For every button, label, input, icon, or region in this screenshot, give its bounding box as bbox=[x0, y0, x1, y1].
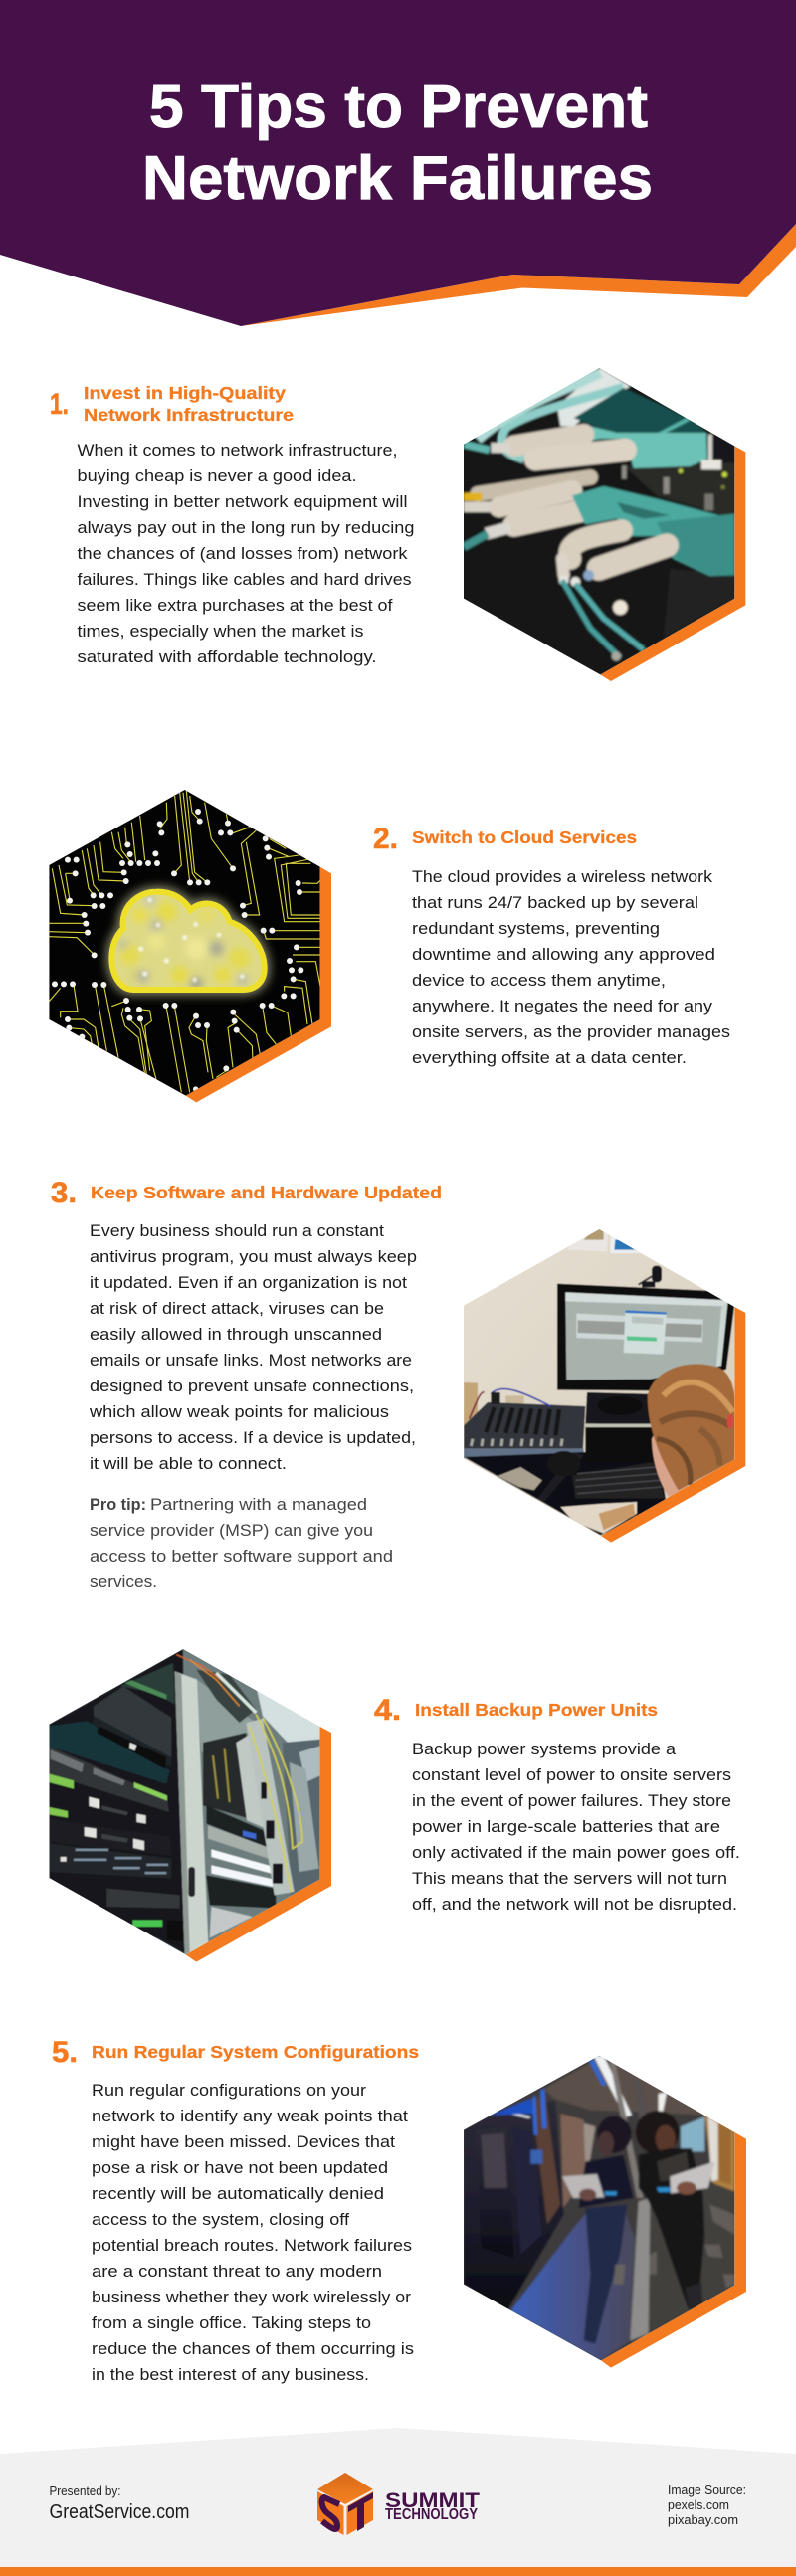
text block: image sources: Image Source: bbox=[668, 2483, 746, 2497]
image: server racks hexagon bbox=[44, 1643, 337, 1966]
heading: tip 4: Install Backup Power Units bbox=[415, 1700, 658, 1720]
image: glowing cloud on circuit board hexagon bbox=[44, 786, 337, 1109]
panel: tip 3 bbox=[51, 1177, 751, 1591]
logo: Summit Technology bbox=[317, 2473, 480, 2535]
text block: tip 2 body: onsite servers, as the provider manages bbox=[412, 1023, 730, 1041]
text block: image sources: pexels.com bbox=[668, 2497, 729, 2512]
text block: tip 3 body: it will be able to connect. bbox=[90, 1455, 287, 1473]
text block: tip 3 body bbox=[89, 1222, 417, 1473]
callout: pro tip: Pro tip: bbox=[90, 1496, 146, 1514]
callout: pro tip: Partnering with a managed bbox=[150, 1496, 367, 1514]
heading: tip 1: Invest in High-Quality bbox=[84, 383, 286, 403]
text block: tip 5 body: might have been missed. Devices that bbox=[92, 2133, 395, 2151]
callout: pro tip bbox=[90, 1496, 393, 1591]
heading: tip 5: Run Regular System Configurations bbox=[92, 2042, 419, 2062]
text block: tip 5 body: from a single office. Taking steps to bbox=[92, 2314, 371, 2332]
text block: tip 3 body: designed to prevent unsafe connections, bbox=[90, 1378, 414, 1395]
text block: tip 1 body: When it comes to network infrastructure, bbox=[78, 442, 398, 460]
text block: presented by bbox=[50, 2484, 189, 2523]
text block: image sources bbox=[668, 2483, 746, 2527]
heading: tip 3: Keep Software and Hardware Updated bbox=[91, 1183, 442, 1202]
text block: tip 5 body: access to the system, closing off bbox=[92, 2211, 349, 2229]
number 2: 2. bbox=[373, 823, 398, 855]
text block: presented by: GreatService.com bbox=[50, 2501, 189, 2523]
text block: tip 1 body: buying cheap is never a good idea. bbox=[78, 467, 356, 485]
text block: tip 2 body: redundant systems, preventing bbox=[412, 920, 660, 938]
text block: tip 3 body: Every business should run a constant bbox=[90, 1222, 384, 1240]
text block: tip 4 body: Backup power systems provide a bbox=[412, 1741, 677, 1758]
image: fiber optic cables hexagon bbox=[458, 363, 751, 686]
number 3: 3. bbox=[51, 1177, 77, 1209]
logo: Summit Technology: TECHNOLOGY bbox=[385, 2506, 479, 2523]
panel: tip 5 bbox=[52, 2036, 751, 2384]
text block: tip 5 body: network to identify any weak points that bbox=[92, 2108, 408, 2125]
footer panel bbox=[0, 2428, 796, 2576]
text block: tip 1 body: the chances of (and losses from) network bbox=[78, 545, 408, 563]
text block: tip 3 body: persons to access. If a device is updated, bbox=[90, 1429, 416, 1447]
number 1: 1. bbox=[50, 388, 69, 421]
text block: tip 4 body: constant level of power to onsite servers bbox=[412, 1766, 731, 1784]
title: Network Failures bbox=[142, 144, 653, 213]
image: person at computer and mixer hexagon bbox=[458, 1223, 751, 1547]
text block: image sources: pixabay.com bbox=[668, 2512, 738, 2527]
text block: tip 1 body: saturated with affordable technology. bbox=[78, 648, 376, 666]
heading: tip 1 bbox=[84, 383, 294, 425]
callout: pro tip: access to better software support and bbox=[90, 1548, 393, 1565]
panel: tip 4 bbox=[44, 1643, 740, 1966]
text block: tip 3 body: at risk of direct attack, viruses can be bbox=[90, 1300, 384, 1318]
text block: tip 4 body: in the event of power failures. They store bbox=[412, 1792, 731, 1810]
text block: tip 1 body: failures. Things like cables and hard drives bbox=[78, 571, 412, 589]
text block: tip 1 body: seem like extra purchases at the best of bbox=[78, 597, 393, 615]
text block: presented by: Presented by: bbox=[50, 2484, 121, 2498]
text block: tip 2 body: that runs 24/7 backed up by several bbox=[412, 894, 698, 912]
logo: Summit Technology: SUMMIT bbox=[385, 2489, 480, 2512]
text block: tip 5 body: in the best interest of any business. bbox=[92, 2366, 369, 2384]
callout: pro tip: service provider (MSP) can give you bbox=[90, 1522, 373, 1540]
text block: tip 5 body: Run regular configurations on your bbox=[92, 2082, 367, 2100]
panel: tip 1 bbox=[50, 363, 751, 686]
text block: tip 5 body: reduce the chances of them occurring is bbox=[92, 2340, 414, 2358]
text block: tip 5 body: pose a risk or have not been updated bbox=[92, 2159, 388, 2177]
icon: cloud bbox=[106, 885, 270, 995]
text block: tip 3 body: it updated. Even if an organization is not bbox=[90, 1274, 407, 1292]
text block: tip 1 body: times, especially when the market is bbox=[78, 623, 364, 641]
text block: tip 3 body: antivirus program, you must always keep bbox=[90, 1248, 417, 1266]
heading: tip 1: Network Infrastructure bbox=[84, 405, 294, 425]
text block: tip 4 body: off, and the network will not be disrupted. bbox=[412, 1896, 737, 1914]
text block: tip 2 body: device to access them anytime, bbox=[412, 972, 666, 990]
text block: tip 1 body: always pay out in the long run by reducing bbox=[78, 519, 414, 537]
text block: tip 2 body: everything offsite at a data center. bbox=[412, 1049, 687, 1067]
number 4: 4. bbox=[374, 1694, 401, 1727]
text block: tip 2 body: anywhere. It negates the need for any bbox=[412, 998, 713, 1015]
text block: tip 2 body bbox=[412, 868, 730, 1067]
text block: tip 1 body: Investing in better network equipment will bbox=[78, 493, 408, 511]
text block: tip 5 body: business whether they work wirelessly or bbox=[92, 2289, 412, 2306]
header banner bbox=[0, 0, 796, 326]
callout: pro tip: services. bbox=[90, 1573, 157, 1591]
text block: tip 4 body: This means that the servers will not turn bbox=[412, 1870, 727, 1888]
text block: tip 4 body: power in large-scale batteries that are bbox=[412, 1818, 720, 1836]
text block: tip 4 body: only activated if the main power goes off. bbox=[412, 1844, 740, 1862]
text block: tip 2 body: downtime and allowing any approved bbox=[412, 946, 715, 964]
text block: tip 1 body bbox=[78, 442, 414, 666]
text block: tip 5 body: potential breach routes. Network failures bbox=[92, 2237, 412, 2255]
text block: tip 5 body: are a constant threat to any modern bbox=[92, 2263, 382, 2281]
heading: tip 2: Switch to Cloud Services bbox=[412, 828, 637, 847]
number 5: 5. bbox=[52, 2036, 78, 2069]
panel: tip 2 bbox=[44, 786, 730, 1109]
title: 5 Tips to Prevent bbox=[149, 73, 648, 141]
image: woman with tablet in server room hexagon bbox=[458, 2049, 751, 2372]
text block: tip 3 body: which allow weak points for malicious bbox=[89, 1403, 389, 1421]
title bbox=[142, 73, 653, 213]
text block: tip 5 body bbox=[92, 2082, 414, 2384]
text block: tip 3 body: easily allowed in through unscanned bbox=[90, 1326, 382, 1344]
text block: tip 2 body: The cloud provides a wireless network bbox=[412, 868, 713, 886]
text block: tip 5 body: recently will be automatically denied bbox=[92, 2185, 384, 2203]
text block: tip 3 body: emails or unsafe links. Most networks are bbox=[90, 1352, 412, 1370]
text block: tip 4 body bbox=[412, 1741, 740, 1914]
